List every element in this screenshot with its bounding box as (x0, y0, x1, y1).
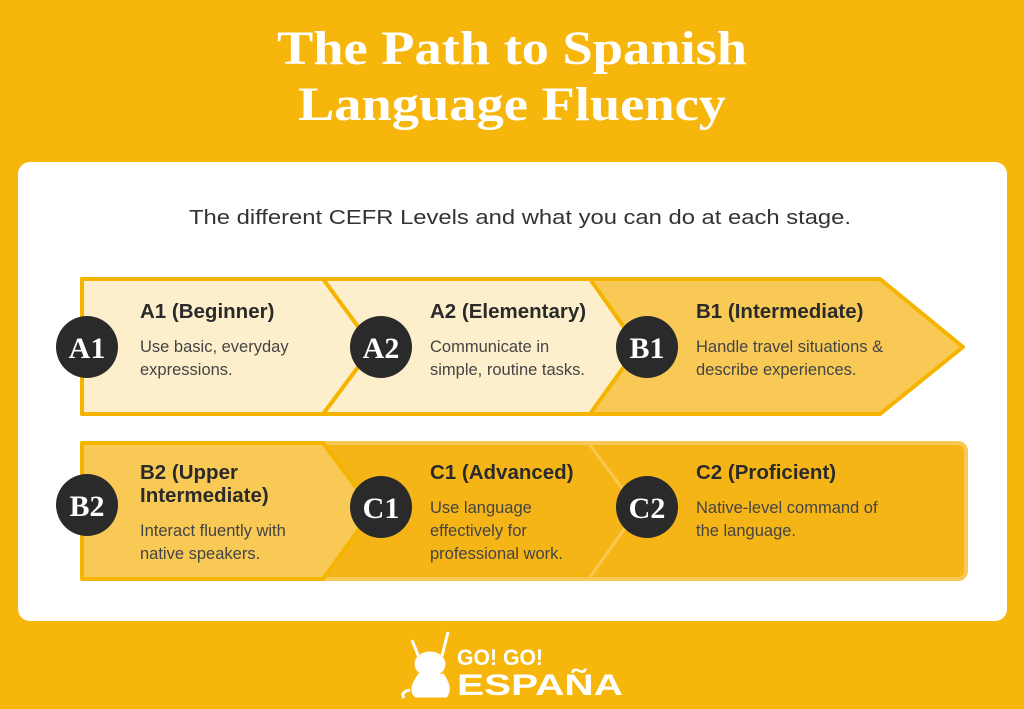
step: A1: A1 (Beginner) (140, 300, 274, 323)
step: A2 (350, 300, 586, 379)
step: C1: C1 (363, 492, 399, 525)
title: The Path to Spanish (277, 22, 747, 75)
step: B1: describe experiences. (696, 361, 857, 379)
step: C2 (616, 461, 878, 540)
step: A2: A2 (Elementary) (430, 300, 586, 323)
step: C1: Use language (430, 499, 532, 517)
step: C2: Native-level command of (696, 499, 878, 517)
step: C2: the language. (696, 522, 796, 540)
step: A1 (56, 300, 289, 379)
step: A1: Use basic, everyday (140, 338, 289, 356)
step: A2: A2 (363, 332, 399, 365)
step: B2: native speakers. (140, 545, 260, 563)
step: A2: Communicate in (430, 338, 549, 356)
step: C1: professional work. (430, 545, 563, 563)
step: A1: expressions. (140, 361, 233, 379)
title (277, 22, 747, 131)
step: B2: B2 (69, 490, 105, 523)
step: B2: B2 (Upper (140, 461, 238, 484)
icon: lynx (403, 632, 448, 698)
step: B1: Handle travel situations & (696, 338, 883, 356)
step: B1: B1 (629, 332, 665, 365)
step: C2: C2 (629, 492, 665, 525)
step: B2 (56, 461, 286, 563)
panel: levels card (18, 162, 1007, 621)
step: C2: C2 (Proficient) (696, 461, 836, 484)
logo: Go! Go! España: ESPAÑA (457, 668, 623, 702)
row 1 arrow (82, 279, 963, 414)
step: B1: B1 (Intermediate) (696, 300, 863, 323)
step: B2: Intermediate) (140, 484, 269, 507)
row 2 arrow (82, 443, 966, 579)
step: B2: Interact fluently with (140, 522, 286, 540)
logo: Go! Go! España (403, 632, 623, 702)
step: C1: effectively for (430, 522, 527, 540)
logo: Go! Go! España: GO! GO! (457, 645, 543, 670)
step: C1 (350, 461, 574, 563)
step: C1: C1 (Advanced) (430, 461, 574, 484)
step: A2: simple, routine tasks. (430, 361, 585, 379)
step: A1: A1 (69, 332, 105, 365)
subtitle: The different CEFR Levels and what you can do at each stage. (189, 207, 851, 229)
step: B1 (616, 300, 883, 379)
title: Language Fluency (298, 78, 726, 131)
